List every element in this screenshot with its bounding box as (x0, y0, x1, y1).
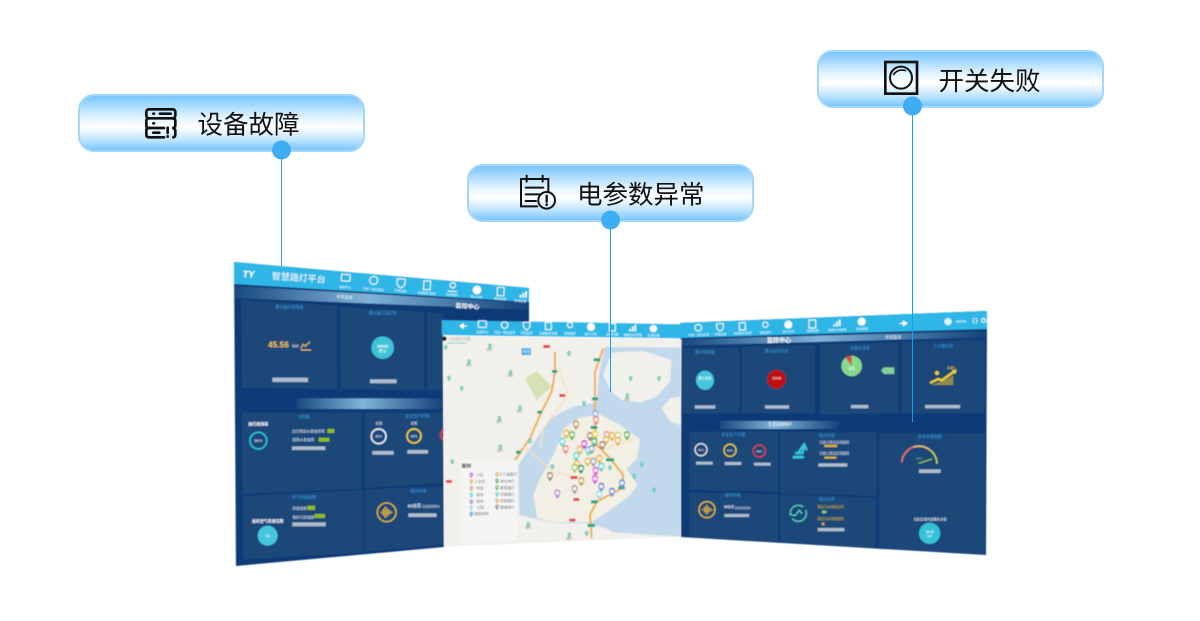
panel: centre map screen (442, 320, 682, 547)
map navigation icons: 车辆额外管理 (539, 330, 557, 335)
callout: device fault (79, 95, 364, 160)
navigation icons: 统计分析 (470, 294, 483, 299)
card: speedometer: 80% (916, 457, 922, 461)
connector line: parameter anomaly (610, 220, 611, 392)
user controls (944, 318, 986, 325)
map legend: 学校 (476, 485, 484, 490)
card: lamp count: 累计路灯亮灯率 (369, 309, 397, 315)
card: growth arrow: 3.6% (947, 366, 955, 370)
screen heading: 监控中心 (767, 337, 791, 345)
card: red stat: 累计运行时长 (765, 347, 789, 353)
screen heading: 监控中心 (455, 302, 480, 311)
navigation icons: 报警管理 (494, 296, 506, 301)
card: speedometer: 当前区域内道路积水量 (913, 517, 947, 522)
card: lighting rate: 光照度 (298, 413, 310, 419)
card: air quality (252, 494, 326, 546)
map navigation icons: 系统管理 (647, 332, 659, 337)
card: red stat (765, 347, 789, 409)
card: air quality: 60 (265, 533, 271, 538)
section heading: 状态监测 (336, 293, 353, 300)
card: air quality: 当前空气质量指数 (252, 517, 284, 523)
map legend: 商场 (476, 499, 484, 504)
map north land (603, 351, 672, 402)
map legend (460, 460, 517, 544)
map legend: 图例 (462, 463, 471, 470)
card: power reading (268, 303, 311, 382)
card: recycle stats: 周边水质 (819, 495, 835, 501)
back arrow (460, 324, 467, 328)
platform title: 智慧路灯平台 (272, 270, 326, 285)
map minor roads (523, 367, 637, 478)
station labels: 路灯 (466, 362, 472, 367)
card: noise: 60分贝 (724, 504, 735, 509)
icon: round switch (885, 62, 917, 94)
right navigation icons (688, 317, 868, 337)
map type button: 地图 (522, 348, 530, 354)
card: power reading: 45.56 (268, 339, 289, 349)
station labels (466, 346, 630, 540)
right navigation icons: 环境监管 (714, 331, 726, 337)
connector line: device fault (281, 150, 282, 266)
label text: 开关失败 (938, 68, 1041, 96)
card: noise: 噪声环境 (725, 491, 741, 497)
right navigation icons: 系统管理 (856, 326, 868, 331)
card: teal stat (695, 349, 715, 409)
callout: parameter anomaly (468, 165, 753, 230)
card: teal stat: 累计用电量 (695, 349, 715, 355)
map legend: 工业区 (475, 479, 486, 484)
station labels: 路灯 (496, 419, 502, 424)
map legend: 桥梁路灯 (500, 498, 515, 503)
coloured map pins (547, 410, 630, 500)
map navigation icons (476, 321, 659, 337)
card: speedometer: m³ (927, 534, 933, 539)
card: teal stat: 累计用电 (698, 376, 712, 381)
map legend: 主干道路灯 (499, 472, 517, 477)
left screen upper section (241, 270, 527, 409)
map navigation icons: 监控中心 (476, 329, 488, 334)
card: lighting rate: 白灯亮起水泵故障率 (292, 428, 325, 433)
card: noise level: 噪声环境 (410, 488, 426, 494)
station labels: 路灯 (566, 535, 572, 540)
card: safety gauges: 90% (411, 434, 417, 438)
section heading lower: 生活设施维护 (768, 420, 792, 426)
station labels: 路灯 (497, 447, 503, 452)
map legend: 隧道路灯 (500, 504, 515, 509)
card: excavator (793, 432, 850, 467)
map legend: 公园 (476, 505, 484, 510)
highway labels (446, 345, 625, 527)
card: noise: 可接受范围内 (735, 506, 751, 510)
card: growth arrow (925, 343, 960, 408)
navigation icons: 监控中心 (339, 284, 351, 290)
card: pie chart (841, 345, 894, 408)
map search tab: 当前路灯位置 (449, 336, 471, 341)
right screen upper section (682, 317, 987, 429)
card: growth arrow: 人口增长率 (933, 343, 953, 349)
card: lighting rate (248, 413, 334, 450)
map navigation icons: 统计分析 (585, 331, 597, 336)
label text: 电参数异常 (577, 182, 705, 210)
map navigation icons: 视频维护 (564, 330, 576, 335)
card: lighting rate: 路灯故障率 (248, 421, 268, 427)
card: noise level (377, 488, 440, 522)
map roads (515, 348, 623, 538)
navigation icons: 环境一体化监测 (363, 286, 384, 292)
icon: calendar warning (521, 176, 555, 209)
map legend: 医院 (476, 492, 484, 497)
card: lamp count (369, 309, 397, 383)
card: gauge rings: 90% (756, 449, 763, 453)
card: safety gauges: 优秀 (411, 420, 418, 425)
map navigation icons: 数据分析管理 (624, 332, 642, 337)
map water (518, 347, 681, 537)
card: air quality: 空气质量指数 (292, 494, 316, 500)
card: gauge rings (695, 431, 771, 466)
platform logo: TY (243, 270, 255, 280)
card: pie chart: 在线 (848, 366, 856, 371)
card: recycle stats: 周边污水排放超标 (817, 516, 845, 521)
card: speedometer: 综合环境指数 (918, 433, 942, 439)
card: lighting rate: 超亮水泵故障 (292, 437, 315, 442)
card: speedometer (902, 433, 947, 544)
card: noise level: 60分贝 (408, 503, 422, 510)
map legend: 景观路灯 (500, 485, 515, 490)
card: power reading: 累计路灯用电量 (275, 303, 303, 309)
station labels: 路灯 (487, 346, 493, 351)
card: safety gauges: 80% (375, 435, 382, 439)
map park (525, 371, 552, 400)
right navigation icons: 环境一体化监测 (688, 332, 709, 337)
card: safety gauges (371, 413, 453, 455)
card: recycle stats: 周边污水排放达标 (817, 504, 845, 509)
map search tab (442, 336, 471, 343)
right screen lower section (689, 431, 985, 554)
navigation icons (339, 274, 527, 304)
card: pie chart: 设备在线率 (850, 345, 870, 351)
right navigation icons: 车辆额外管理 (734, 330, 752, 336)
card: excavator: 已施工周边区域面积 (819, 439, 850, 444)
callout: switch failure (818, 51, 1103, 116)
icon: server fault (146, 109, 175, 137)
connector line: switch failure (912, 106, 913, 422)
map type button (522, 348, 531, 355)
card: noise level: 可接受范围内 (422, 504, 440, 509)
card: recycle stats (789, 495, 845, 531)
station labels: 路灯 (525, 525, 531, 530)
card: gauge rings: 安全生产灯情 (721, 431, 745, 437)
card: lamp count: 96538 (377, 344, 389, 349)
card: air quality: 质量指数 (292, 506, 307, 511)
navigation icons: 视频维护 (446, 292, 458, 297)
navigation icons: 车辆额外管理 (417, 290, 436, 296)
card: excavator: 已施工周边区域面积 (819, 451, 850, 456)
card: excavator: 周边环境 (819, 432, 835, 438)
map small islands (553, 397, 681, 542)
card: gauge rings: 80% (698, 448, 704, 452)
card: safety gauges: 安全生产灯情 (405, 413, 429, 419)
map header (442, 320, 682, 338)
section heading: 状态监测 (885, 333, 901, 339)
panel: left dashboard screen (234, 262, 529, 566)
card: power reading: kW (292, 343, 299, 348)
left screen lower section (242, 413, 453, 559)
right navigation icons: 数据分析管理 (828, 327, 846, 332)
card: lighting rate: 50% (254, 438, 263, 443)
card: gauge rings: 90% (727, 449, 733, 453)
panel: right dashboard screen (680, 311, 987, 555)
right navigation icons: 报警管理 (807, 328, 819, 333)
right navigation icons: 视频维护 (760, 329, 772, 335)
card: lamp count: 累计 (379, 347, 387, 353)
teal station markers (444, 344, 661, 538)
map navigation icons: 环境监管 (521, 330, 533, 335)
map legend: 河道路灯 (500, 492, 515, 497)
next arrow (899, 321, 907, 326)
card: safety gauges: 优良 (376, 421, 383, 426)
card: noise (699, 491, 751, 518)
navigation icons: 环境监管 (394, 288, 407, 293)
navigation icons: 系统配置 (514, 298, 526, 304)
card: red stat: 70000 (772, 377, 781, 381)
station labels: 路灯 (517, 408, 523, 413)
card: air quality: 指标污染指数 (292, 515, 315, 520)
map navigation icons: 环境一体化监测 (494, 329, 515, 334)
station labels: 路灯 (624, 396, 630, 401)
map central island (533, 414, 640, 522)
map legend: 绿化带灯 (500, 478, 515, 483)
map legend: 道路照明 (474, 511, 489, 516)
right navigation icons: 统计分析 (783, 328, 795, 334)
card: speedometer: 11.5 (926, 529, 934, 534)
label text: 设备故障 (198, 112, 300, 140)
map navigation icons: 报警管理 (606, 331, 618, 336)
map legend: 小区 (476, 472, 484, 477)
user controls: admin (956, 318, 966, 323)
station labels: 路灯 (508, 373, 514, 378)
